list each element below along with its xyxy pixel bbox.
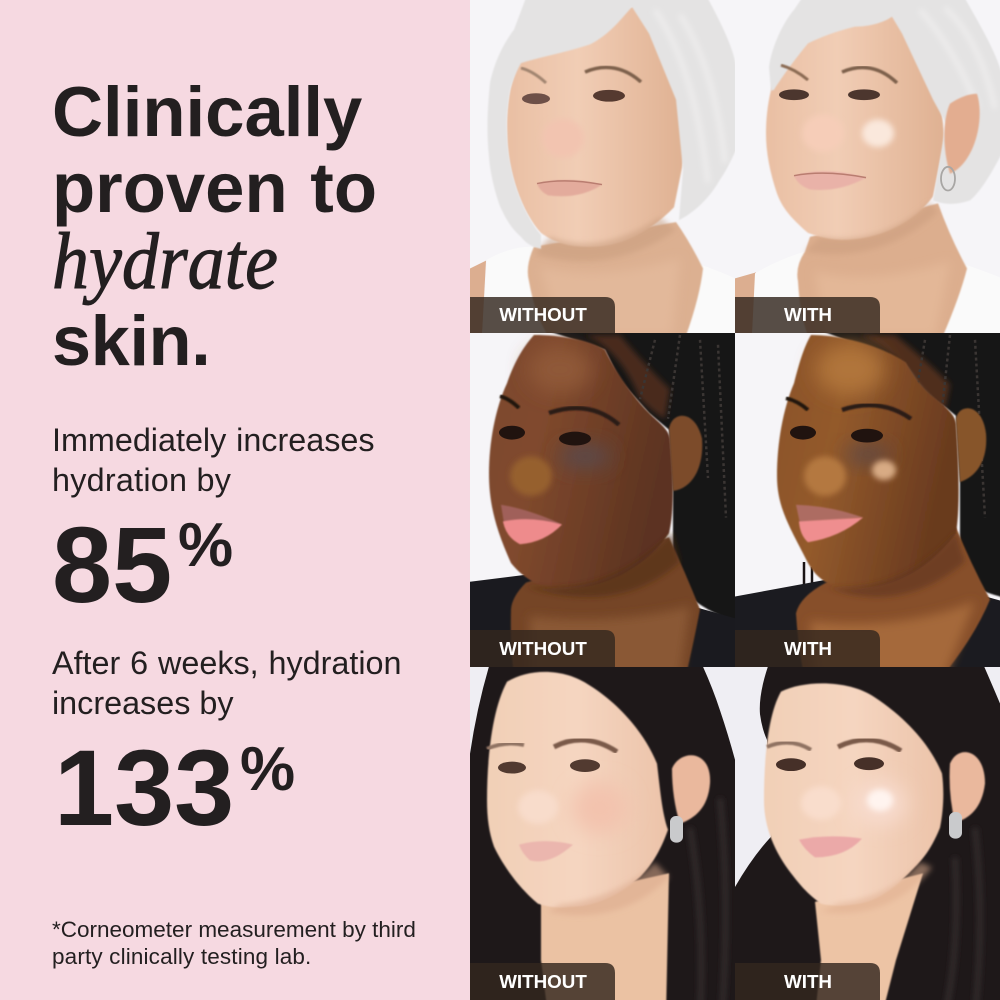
label: with xyxy=(735,630,880,667)
footnote: party clinically testing lab. xyxy=(52,944,311,969)
label: without: WITHOUT xyxy=(499,971,587,992)
heading: proven to xyxy=(52,148,377,227)
stat text: immediate hydration xyxy=(52,422,375,498)
stat text: after 6 weeks: After 6 weeks, hydration xyxy=(52,645,402,681)
stat number: 85 percent xyxy=(52,504,233,625)
photo: young woman with xyxy=(735,650,1000,1000)
eyes xyxy=(522,90,625,104)
footnote xyxy=(52,917,416,969)
eyes xyxy=(498,759,600,774)
label: with: WITH xyxy=(784,638,832,659)
stat number: 133 percent: % xyxy=(240,735,295,804)
ear and earring xyxy=(941,94,980,190)
left pink panel xyxy=(0,0,470,1000)
label: with xyxy=(735,297,880,333)
stat number: 85 percent: % xyxy=(178,511,233,580)
label: with: WITH xyxy=(784,971,832,992)
stat number: 133 percent: 133 xyxy=(54,727,234,848)
photo: young woman without xyxy=(470,650,735,1000)
stat text: after 6 weeks: increases by xyxy=(52,685,234,721)
label: without: WITHOUT xyxy=(499,304,587,325)
photo: dark-skinned woman with xyxy=(735,325,1000,675)
label: with xyxy=(735,963,880,1000)
stat text: immediate hydration: Immediately increases xyxy=(52,422,375,458)
eyes xyxy=(776,757,884,771)
heading: hydrate xyxy=(52,216,278,306)
eyes xyxy=(499,426,591,445)
photo: older woman with xyxy=(735,0,1000,336)
label: with: WITH xyxy=(784,304,832,325)
ear xyxy=(669,416,702,491)
ear xyxy=(956,408,986,482)
heading: skin. xyxy=(52,301,210,380)
photo: dark-skinned woman without xyxy=(470,325,745,675)
label: without xyxy=(470,630,615,667)
heading xyxy=(52,72,377,380)
stat text: immediate hydration: hydration by xyxy=(52,462,232,498)
lips xyxy=(501,505,562,544)
lips xyxy=(796,505,863,542)
heading: Clinically xyxy=(52,72,362,151)
footnote: *Corneometer measurement by third xyxy=(52,917,416,942)
eyes xyxy=(790,426,883,443)
ear and earring xyxy=(670,755,710,843)
eyes xyxy=(779,89,880,100)
label: without xyxy=(470,963,615,1000)
photo: older woman without xyxy=(470,0,736,336)
stat number: 85 percent: 85 xyxy=(52,504,172,625)
ear and earring xyxy=(949,752,985,839)
label: without: WITHOUT xyxy=(499,638,587,659)
label: without xyxy=(470,297,615,333)
stat text: after 6 weeks xyxy=(52,645,402,721)
